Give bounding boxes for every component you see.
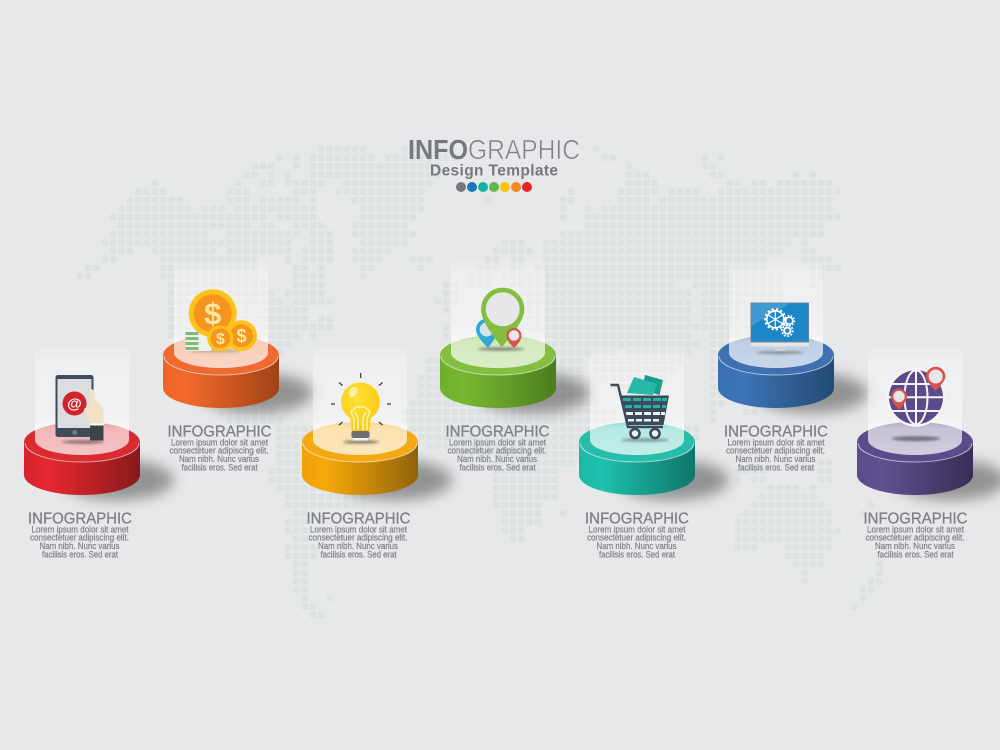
step 2: orange cylinder	[163, 258, 313, 413]
text: step 5 caption: Nam nibh. Nunc varius	[596, 541, 677, 551]
text: step 3 caption: consectetuer adipiscing elit.	[308, 533, 408, 543]
text: step 7 caption: Lorem ipsum dolor sit amet	[867, 524, 964, 534]
step 5: teal cylinder	[579, 345, 729, 500]
text: step 5 caption	[585, 510, 689, 559]
text: step 1 caption: consectetuer adipiscing elit.	[30, 533, 129, 543]
title colour dots	[456, 182, 532, 192]
step 3: yellow cylinder	[302, 345, 452, 500]
icon: tablet with at sign: @	[67, 396, 82, 412]
text: step 2 caption: Nam nibh. Nunc varius	[179, 454, 259, 464]
text: step 2 caption: Lorem ipsum dolor sit amet	[171, 437, 268, 447]
text: step 1 caption: Nam nibh. Nunc varius	[40, 541, 120, 551]
text: step 3 caption	[306, 510, 410, 559]
step 7: purple cylinder	[857, 345, 1000, 500]
text: step 1 caption	[28, 510, 132, 559]
text: step 2 caption: INFOGRAPHIC	[168, 423, 272, 440]
text: step 6 caption	[724, 423, 828, 472]
step 6: blue cylinder	[718, 258, 868, 413]
icon: coins and banknotes: $	[216, 331, 225, 348]
text: step 1 caption: facilisis eros. Sed erat	[42, 549, 118, 559]
text: step 6 caption: Nam nibh. Nunc varius	[736, 454, 816, 464]
title: INFO	[408, 134, 468, 165]
icon: shopping cart	[610, 375, 669, 442]
text: step 4 caption: INFOGRAPHIC	[446, 423, 550, 440]
text: step 4 caption: facilisis eros. Sed erat	[460, 462, 536, 472]
text: step 1 caption: INFOGRAPHIC	[28, 510, 132, 527]
text: step 6 caption: Lorem ipsum dolor sit amet	[728, 437, 825, 447]
text: step 2 caption: consectetuer adipiscing elit.	[170, 446, 268, 456]
step 4: green cylinder	[440, 258, 590, 413]
icon: coins and banknotes: $	[204, 296, 221, 331]
text: step 4 caption: consectetuer adipiscing elit.	[448, 446, 546, 456]
icon: location pins	[476, 288, 524, 351]
text: step 3 caption: Nam nibh. Nunc varius	[318, 541, 398, 551]
dotted world map	[77, 149, 885, 615]
text: step 7 caption: Nam nibh. Nunc varius	[875, 541, 955, 551]
text: step 7 caption	[864, 510, 968, 559]
text: step 1 caption: Lorem ipsum dolor sit amet	[32, 524, 129, 534]
text: step 4 caption: Lorem ipsum dolor sit amet	[449, 437, 546, 447]
icon: coins and banknotes	[186, 289, 257, 353]
text: step 5 caption: consectetuer adipiscing elit.	[587, 533, 686, 543]
title: Design Template	[430, 162, 558, 180]
title: GRAPHIC	[468, 134, 580, 165]
text: step 6 caption: INFOGRAPHIC	[724, 423, 828, 440]
icon: light bulb	[331, 373, 391, 444]
icon: globe with pins	[886, 367, 946, 441]
text: step 2 caption	[168, 423, 272, 472]
text: step 5 caption: facilisis eros. Sed erat	[599, 549, 675, 559]
text: step 2 caption: facilisis eros. Sed erat	[182, 462, 258, 472]
text: step 7 caption: facilisis eros. Sed erat	[878, 549, 954, 559]
text: step 4 caption	[446, 423, 550, 472]
text: step 5 caption: INFOGRAPHIC	[585, 510, 689, 527]
text: step 3 caption: facilisis eros. Sed erat	[320, 549, 397, 559]
text: step 4 caption: Nam nibh. Nunc varius	[457, 454, 537, 464]
text: step 6 caption: facilisis eros. Sed erat	[738, 462, 814, 472]
icon: coins and banknotes: $	[236, 326, 247, 346]
icon: tablet with at sign	[56, 375, 104, 444]
text: step 3 caption: Lorem ipsum dolor sit amet	[310, 524, 407, 534]
title	[408, 134, 580, 180]
text: step 6 caption: consectetuer adipiscing elit.	[726, 446, 825, 456]
text: step 3 caption: INFOGRAPHIC	[306, 510, 410, 527]
text: step 7 caption: consectetuer adipiscing elit.	[866, 533, 964, 543]
text: step 5 caption: Lorem ipsum dolor sit amet	[588, 524, 686, 534]
icon: monitor with gears	[750, 302, 809, 354]
text: step 7 caption: INFOGRAPHIC	[864, 510, 968, 527]
step 1: red cylinder	[24, 345, 174, 500]
